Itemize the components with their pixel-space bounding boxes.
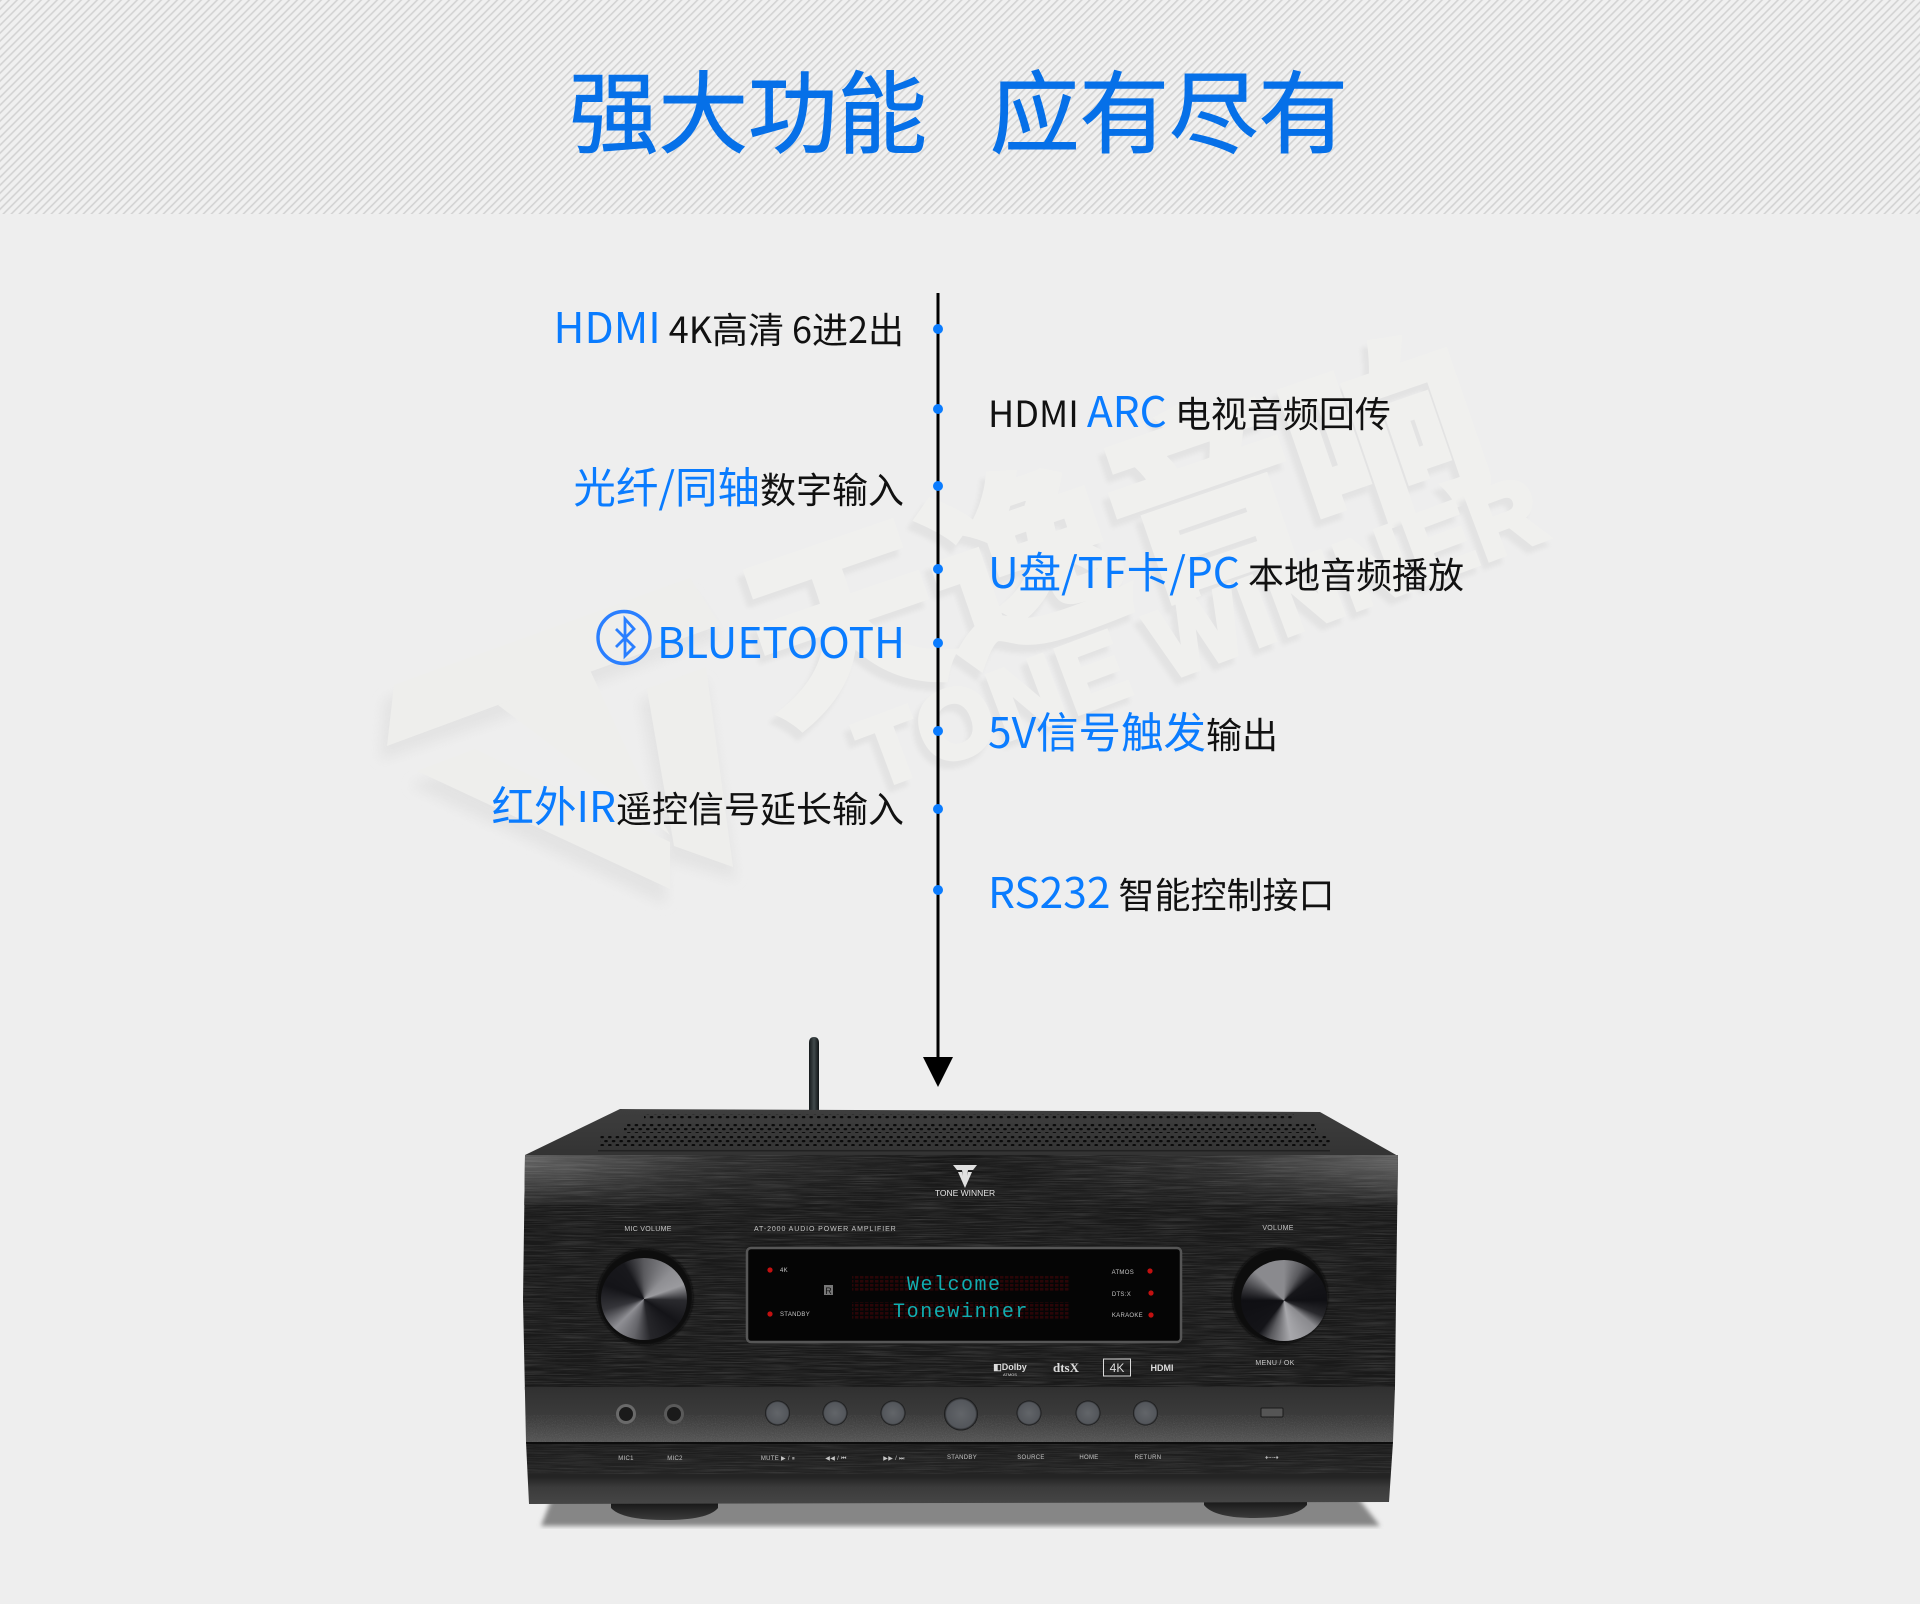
- control labels: SOURCE: [1017, 1455, 1045, 1461]
- shadow: [541, 1498, 1380, 1526]
- label: IR: 红外IR遥控信号延长输入: [492, 774, 904, 835]
- panel labels: MIC VOLUME: [624, 1226, 672, 1233]
- label: USB TF PC: U盘/TF卡/PC 本地音频播放: [988, 540, 1464, 601]
- label: bluetooth: BLUETOOTH: [657, 610, 905, 671]
- USB port: [1261, 1408, 1283, 1417]
- R icon: R: [825, 1286, 832, 1296]
- left knob: [597, 1249, 693, 1345]
- title: [569, 42, 1348, 172]
- label: HDMI ARC: HDMI ARC 电视音频回传: [988, 379, 1391, 440]
- title: 强大功能: [569, 42, 927, 172]
- title: 应有尽有: [990, 42, 1348, 172]
- display text: Tonewinner: [893, 1301, 1029, 1324]
- timeline arrow: [923, 293, 953, 1087]
- format logos: 4K: [1110, 1361, 1124, 1375]
- control labels: HOME: [1079, 1455, 1099, 1461]
- status labels: KARAOKE: [1112, 1313, 1143, 1319]
- antenna: [809, 1037, 819, 1115]
- feet: [611, 1498, 1307, 1520]
- control labels: ▶▶ / ⏭: [883, 1456, 905, 1462]
- watermark english name: TONE WINNER: [845, 456, 1557, 809]
- panel labels: [624, 1225, 1295, 1367]
- control labels: [618, 1453, 1279, 1462]
- status labels: ATMOS: [1112, 1270, 1134, 1276]
- status labels: [780, 1268, 1143, 1319]
- lower control strip: [515, 1387, 1405, 1442]
- control labels: RETURN: [1135, 1455, 1161, 1461]
- control labels: STANDBY: [947, 1455, 977, 1461]
- timeline dots: [933, 324, 943, 895]
- right knob: [1232, 1248, 1328, 1344]
- amplifier product: [515, 1037, 1405, 1526]
- panel labels: AT-2000 AUDIO POWER AMPLIFIER: [754, 1226, 896, 1233]
- display text: Welcome: [907, 1274, 1002, 1297]
- format logos: ◧Dolby: [993, 1362, 1027, 1372]
- display text: [893, 1274, 1029, 1324]
- format logos: [993, 1359, 1174, 1377]
- control labels: MUTE ▶ / ⏸: [761, 1456, 795, 1462]
- watermark logo: [380, 578, 736, 905]
- control labels: MIC1: [618, 1456, 634, 1462]
- status labels: 4K: [780, 1268, 788, 1274]
- top cover: [525, 1109, 1398, 1156]
- watermark: TONE WINNER brand: [380, 264, 1557, 905]
- display panel: [747, 1248, 1181, 1342]
- control labels: ⇠⇢: [1265, 1453, 1279, 1462]
- brand logo: TONE WINNER: [935, 1188, 995, 1198]
- label: RS232: RS232 智能控制接口: [988, 860, 1335, 921]
- control buttons: [765, 1398, 1158, 1430]
- label: 5V trigger: 5V信号触发输出: [988, 700, 1278, 761]
- format logos: dtsX: [1053, 1360, 1080, 1375]
- panel labels: MENU / OK: [1255, 1360, 1295, 1367]
- label: HDMI 4K: HDMI 4K高清 6进2出: [554, 295, 904, 356]
- header band: [0, 0, 1920, 214]
- control labels: MIC2: [667, 1456, 683, 1462]
- status labels: DTS:X: [1112, 1292, 1131, 1298]
- format logos: ATMOS: [1003, 1372, 1017, 1377]
- R icon: [824, 1285, 833, 1296]
- front panel: [515, 1155, 1405, 1504]
- mic jacks: [616, 1404, 684, 1424]
- vents: [598, 1114, 1330, 1152]
- watermark chinese name: 天逸音响: [701, 272, 1510, 779]
- watermark chinese name: 天逸音响: [706, 264, 1515, 771]
- VFD segments: [852, 1275, 1069, 1319]
- label: optical coaxial: 光纤/同轴数字输入: [573, 455, 904, 516]
- icon: bluetooth: [598, 612, 650, 664]
- watermark english name: TONE WINNER: [840, 463, 1552, 816]
- status LEDs: [767, 1267, 1154, 1318]
- control labels: ◀◀ / ⏮: [825, 1456, 847, 1462]
- format logos: HDMI: [1150, 1363, 1174, 1373]
- panel labels: VOLUME: [1262, 1225, 1294, 1232]
- brand logo: [935, 1165, 995, 1198]
- status labels: STANDBY: [780, 1312, 810, 1318]
